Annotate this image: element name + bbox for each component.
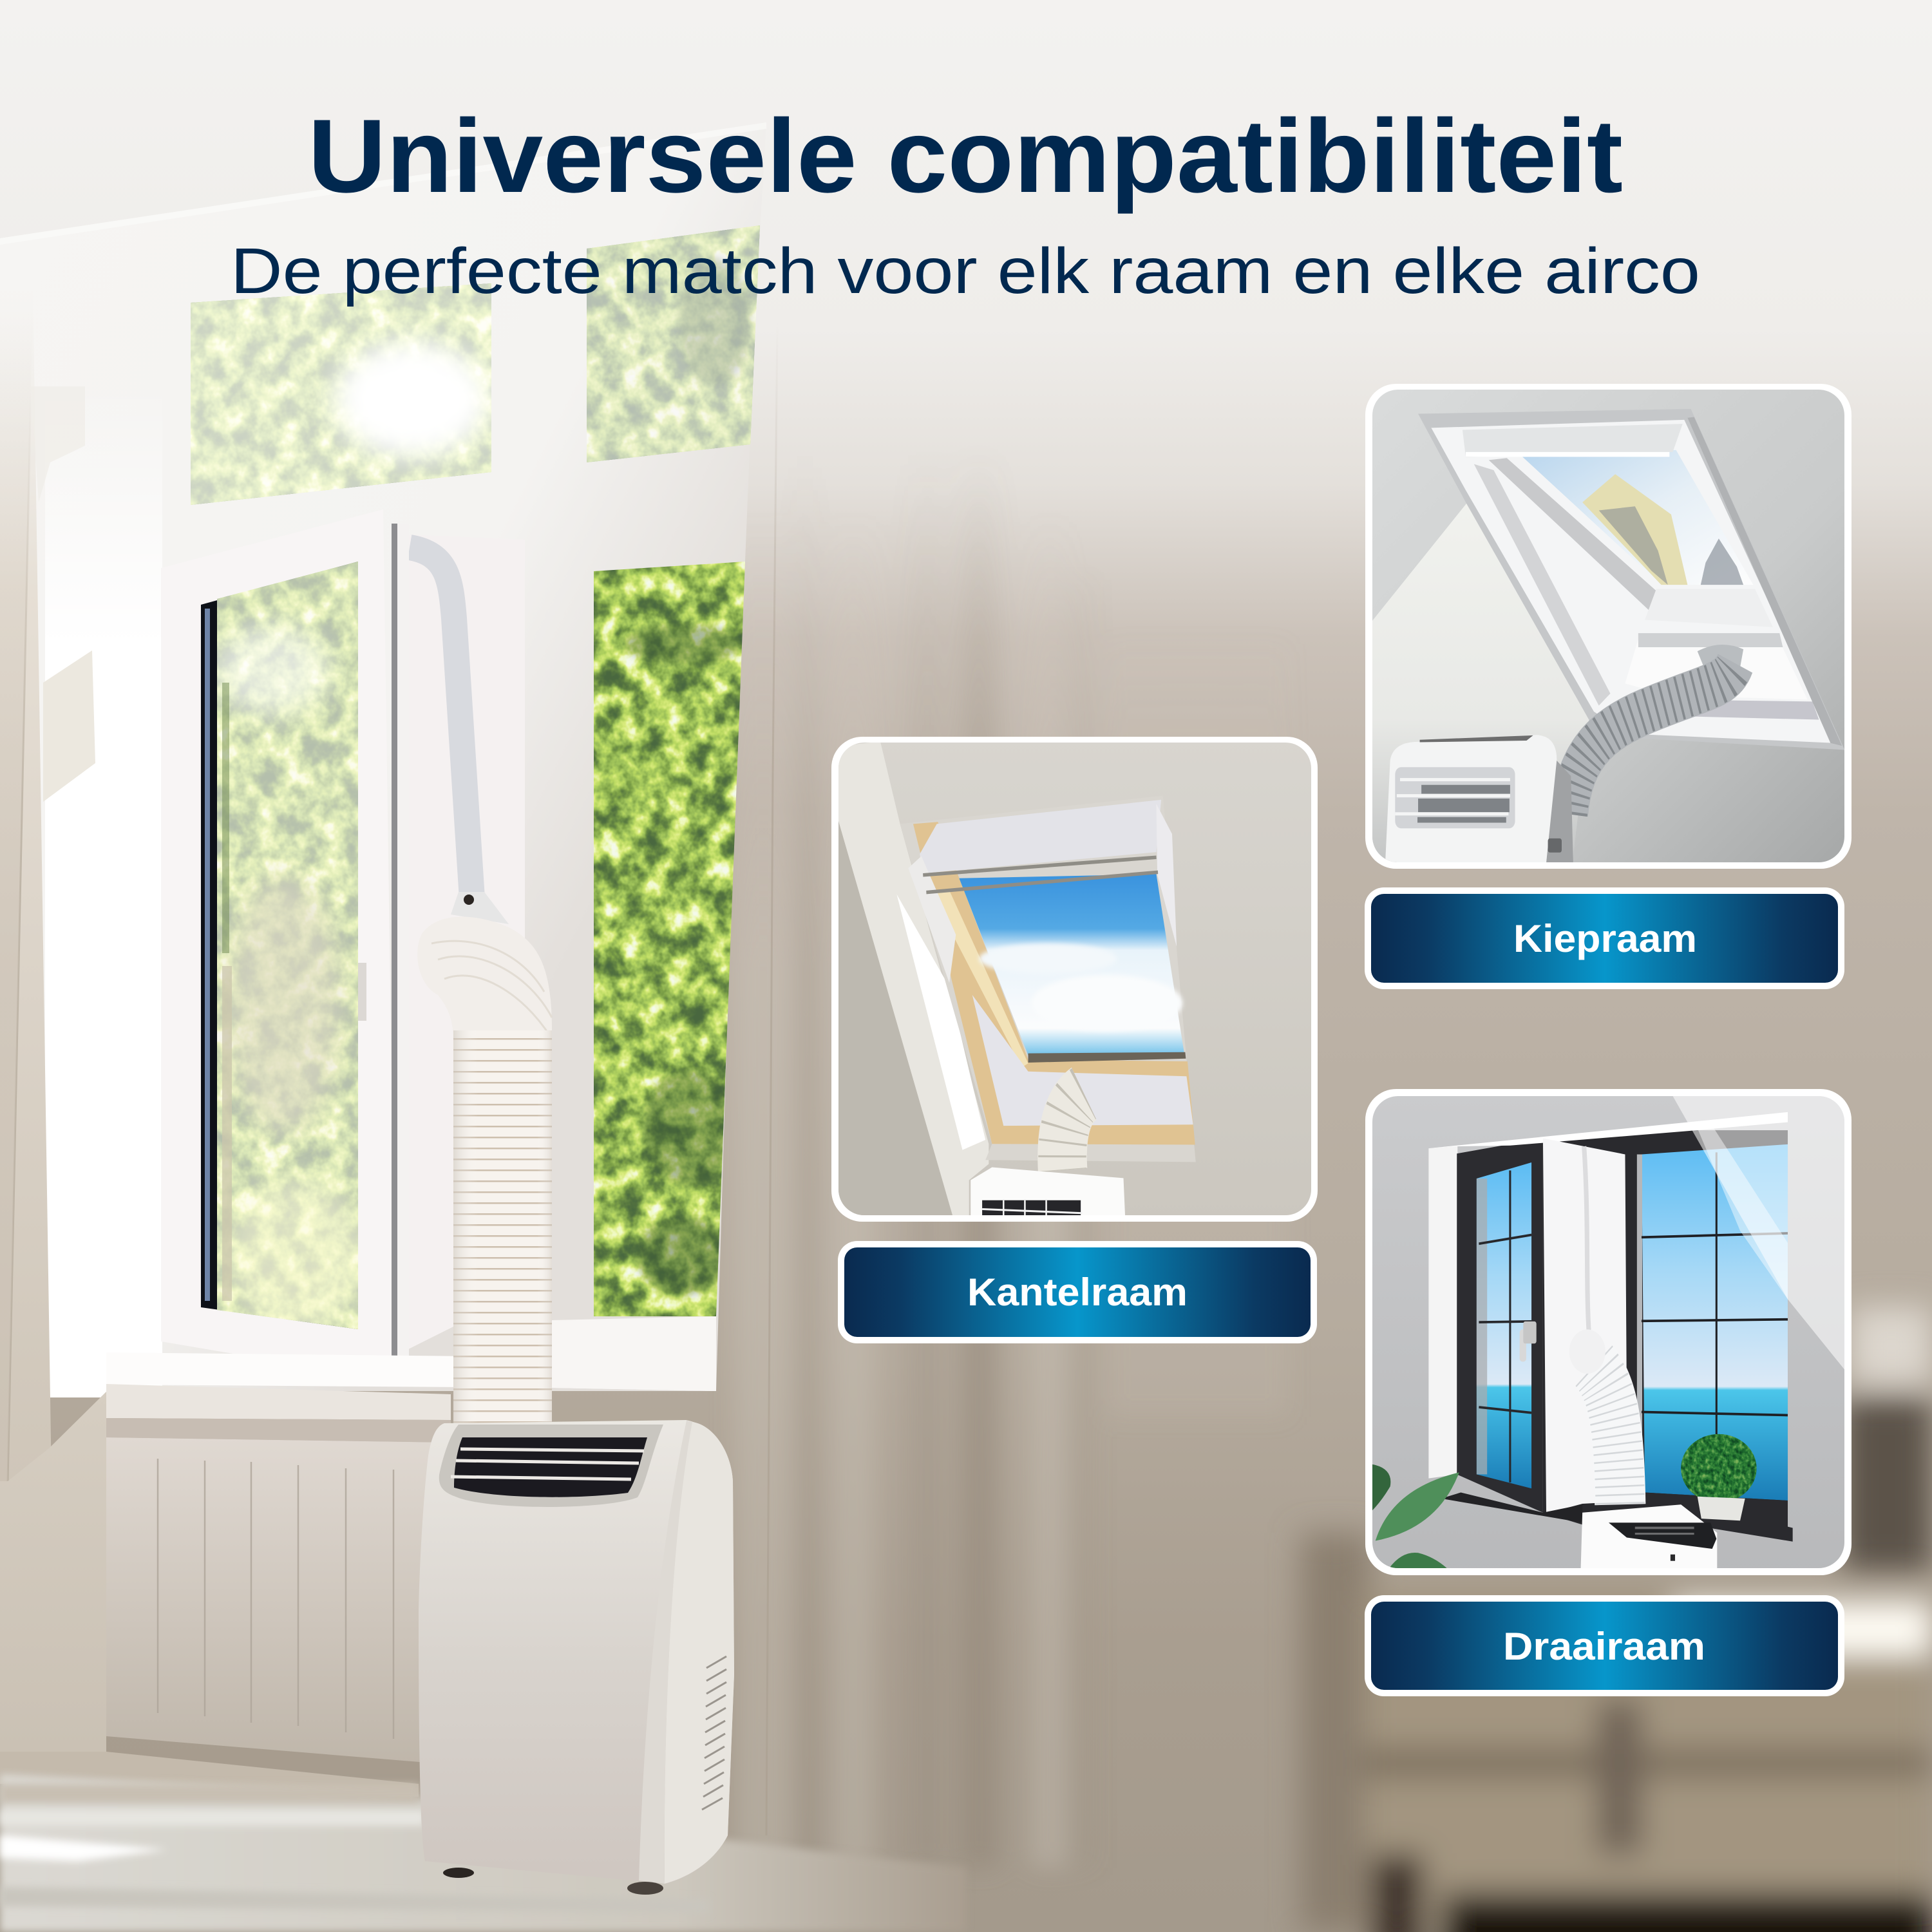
label: Kantelraam (838, 1241, 1317, 1343)
label: Draairaam: Draairaam (1503, 1625, 1705, 1668)
window sill (106, 1352, 716, 1391)
portable air conditioner (419, 1420, 734, 1895)
side vent (702, 1656, 726, 1810)
air vent bezel (439, 1425, 663, 1507)
fabric seal (408, 535, 525, 1349)
lower window pane right with foliage (594, 560, 748, 1320)
title: Universele compatibiliteit (308, 98, 1623, 214)
subtitle: De perfecte match voor elk raam en elke airco (231, 235, 1700, 307)
curtain folds (734, 451, 1288, 1868)
wheels (443, 1868, 474, 1878)
blurred sofa (1301, 1307, 1932, 1932)
upper window pane right (587, 225, 761, 464)
label: Kiepraam (1365, 887, 1844, 989)
panel: Draairaam photo (1365, 1089, 1852, 1577)
label: Kiepraam: Kiepraam (1513, 917, 1697, 960)
upper window pane left (191, 283, 493, 509)
radiator (0, 1384, 451, 1797)
label: Kantelraam: Kantelraam (967, 1271, 1188, 1314)
bright window reveal (45, 386, 162, 1397)
window wall (0, 122, 766, 1391)
zipper tube (410, 547, 472, 898)
handle (358, 963, 366, 1021)
panel: Kantelraam photo (831, 737, 1318, 1222)
label: Draairaam (1365, 1595, 1844, 1696)
panel: Kiepraam photo (1365, 384, 1852, 869)
edge strip (392, 524, 397, 1369)
flexible hose (417, 917, 552, 1423)
left curtain (0, 245, 162, 1481)
open window sash (161, 509, 409, 1381)
floor (0, 1774, 966, 1932)
curtain edge lines (766, 322, 777, 1835)
left wall lower (0, 1392, 106, 1777)
